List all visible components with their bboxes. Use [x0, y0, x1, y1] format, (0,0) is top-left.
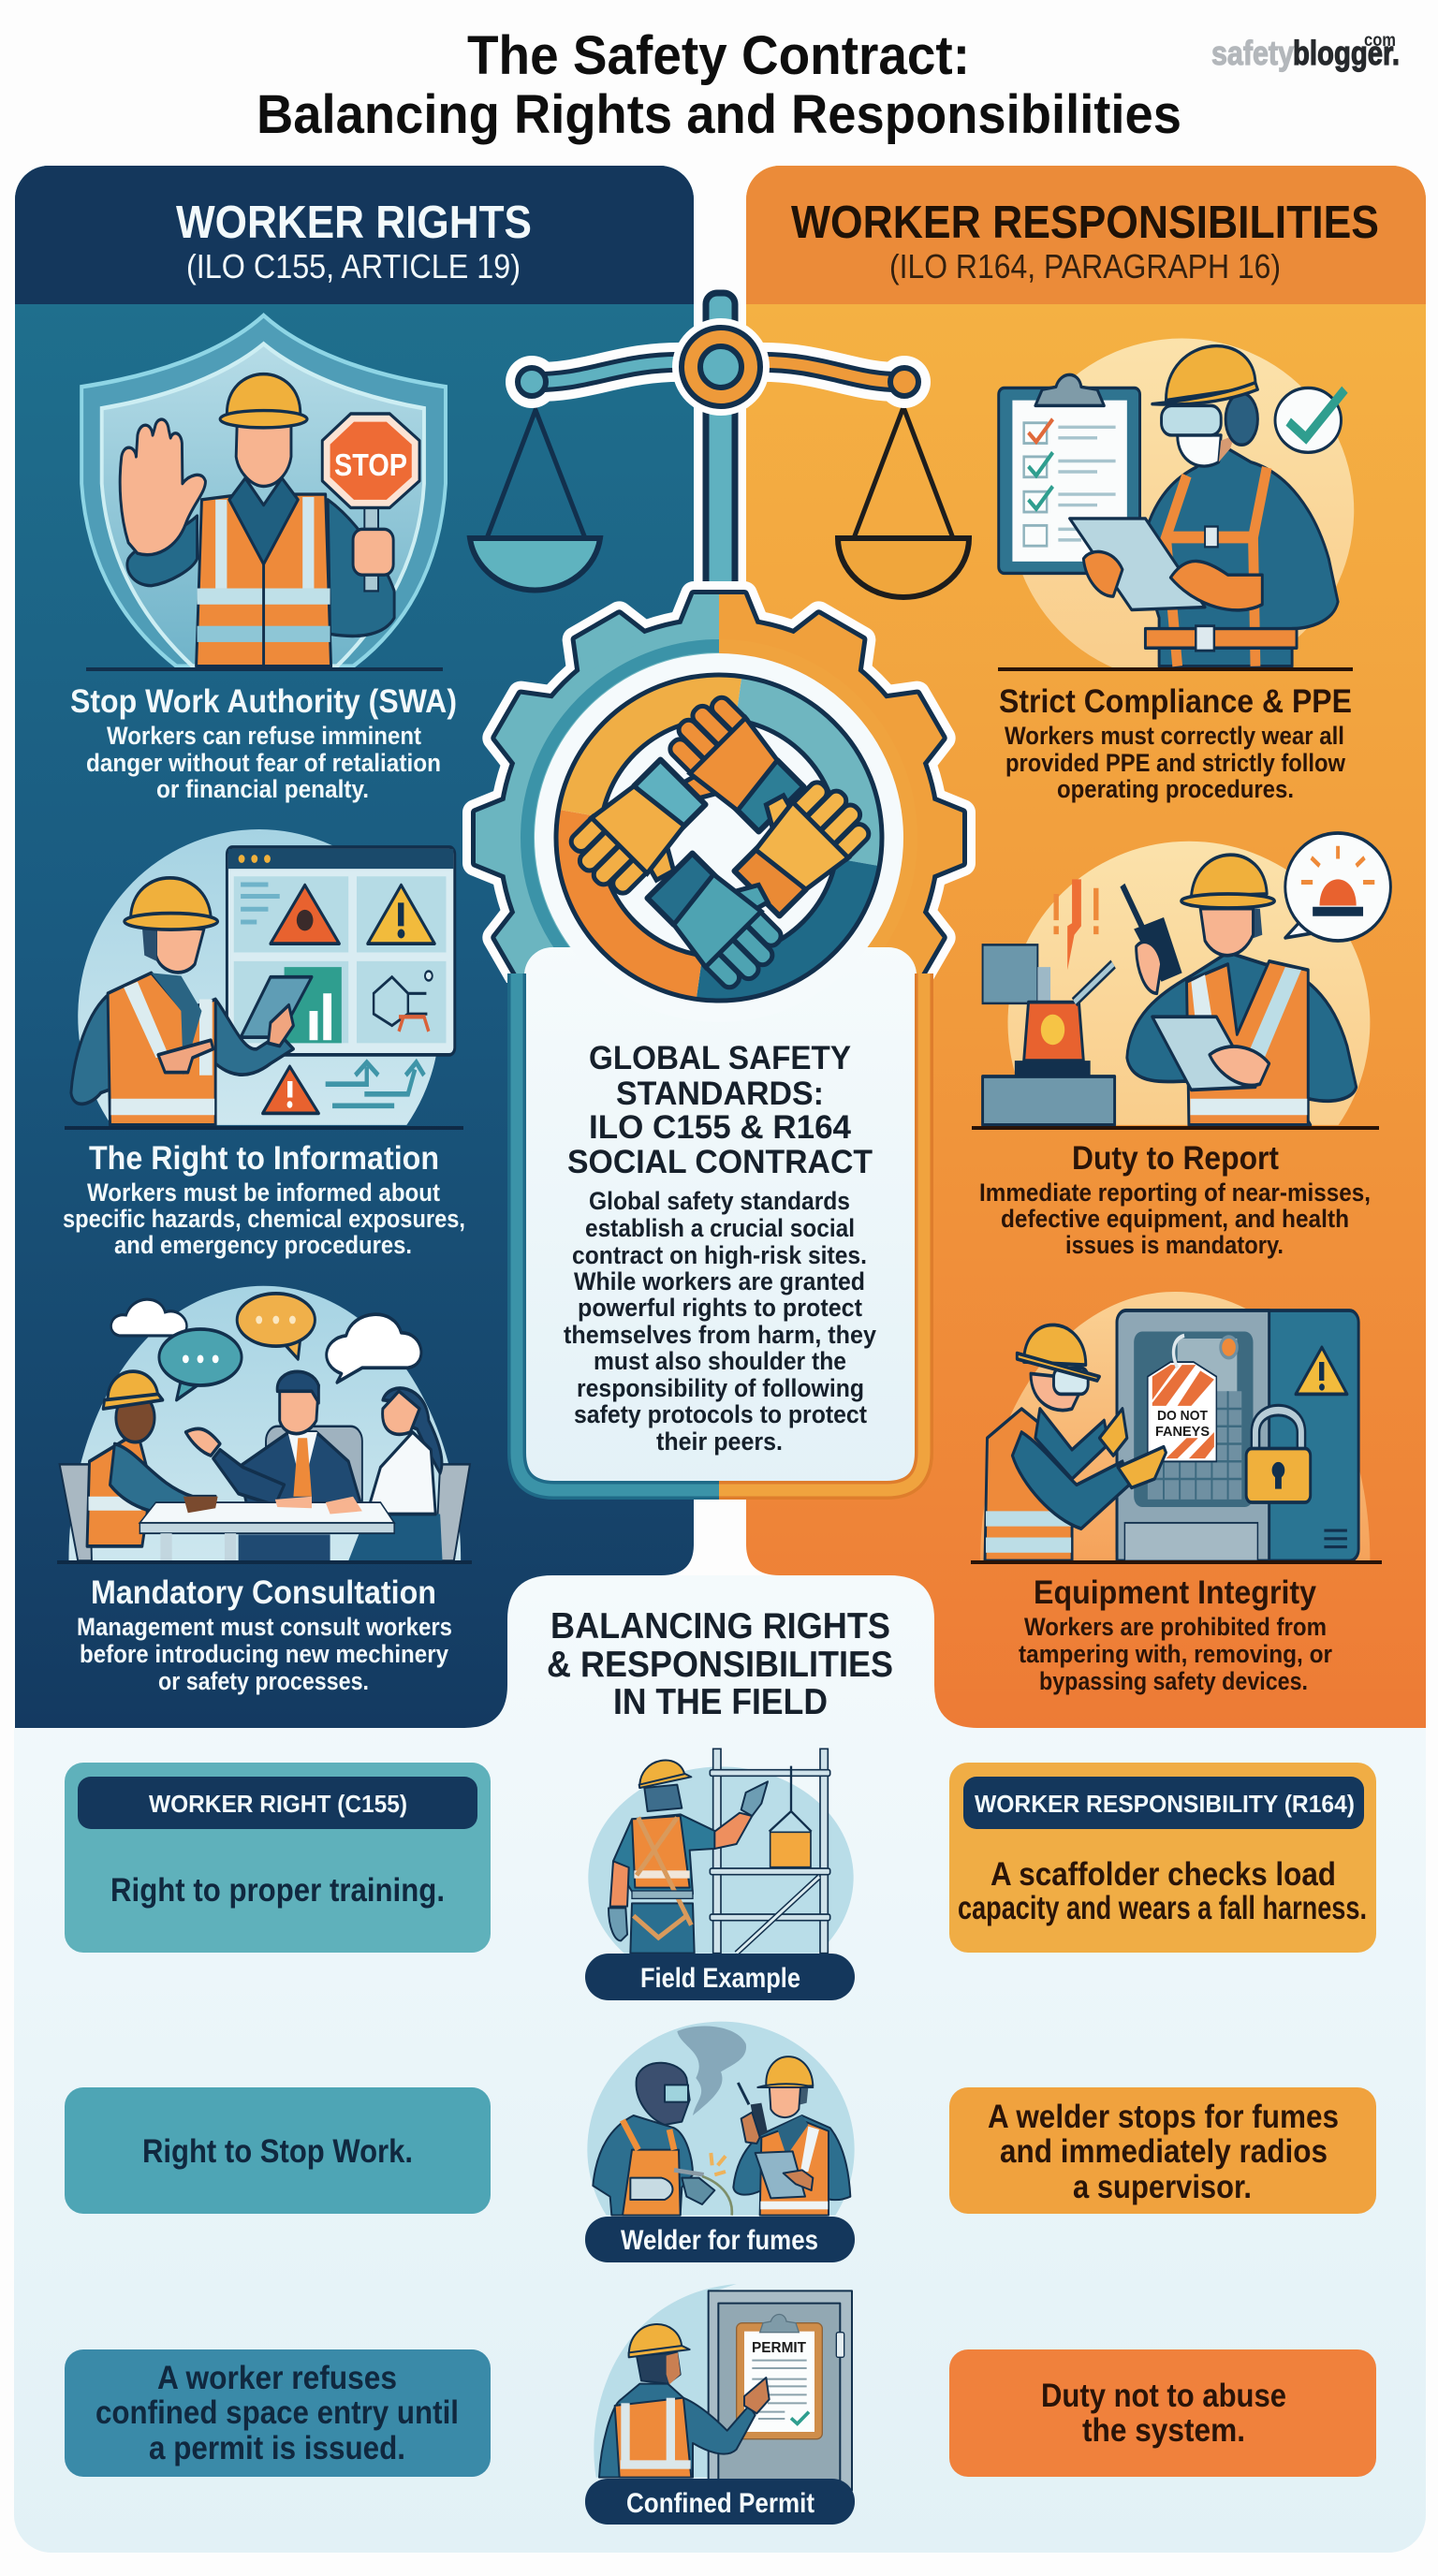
text block: equipment integrity: Equipment Integrity: [1034, 1574, 1316, 1611]
text block: mandatory consultation: [57, 1562, 472, 1695]
logo: safetyblogger.com: [1211, 31, 1400, 72]
text block: global safety standards body: their peers.: [656, 1427, 783, 1456]
logo: safetyblogger.com: blogger.: [1293, 34, 1400, 72]
text block: mandatory consultation: or safety processes.: [158, 1667, 369, 1695]
pill: field example: Field Example: [640, 1963, 800, 1994]
icon: worker reporting defective machine by radio: [983, 833, 1390, 1125]
icon: balance scale: [470, 293, 969, 597]
hand: left: [563, 754, 723, 915]
card: worker right C155: [65, 1763, 491, 1953]
text block: mandatory consultation: Management must consult workers: [77, 1613, 452, 1641]
heading: worker rights: [176, 198, 532, 285]
text block: global safety standards body: Global safety standards: [589, 1187, 850, 1215]
title: [257, 25, 1181, 145]
panel header band: worker rights: [15, 166, 694, 304]
text block: strict compliance and PPE: Strict Compliance & PPE: [999, 683, 1352, 720]
text block: mandatory consultation: before introducing new mechinery: [80, 1640, 448, 1668]
pill: confined permit: [585, 2479, 855, 2525]
pill: worker right: [78, 1777, 477, 1829]
pill: worker right: WORKER RIGHT (C155): [149, 1790, 407, 1818]
card: duty not to abuse the system: [949, 2349, 1376, 2477]
card: right to stop work: Right to Stop Work.: [142, 2133, 413, 2170]
panel: lower field section background: [14, 1575, 1426, 2553]
text block: global safety standards body: [564, 1187, 876, 1456]
hand: bottom: [642, 836, 802, 996]
label: do not tag: DO NOT: [1157, 1408, 1208, 1424]
heading: worker rights: (ILO C155, ARTICLE 19): [186, 247, 521, 285]
left scale pan: [470, 538, 600, 590]
text block: global safety standards body: safety protocols to protect: [574, 1400, 867, 1428]
text block: the right to information: specific hazards, chemical exposures,: [63, 1205, 465, 1233]
panel: worker rights: [15, 166, 694, 1728]
heading: global safety standards: GLOBAL SAFETY: [589, 1040, 851, 1076]
text block: duty to report: defective equipment, and health: [1001, 1205, 1349, 1233]
text block: stop work authority: [70, 669, 457, 803]
pill: worker responsibility: WORKER RESPONSIBILITY (R164): [975, 1790, 1355, 1818]
text block: equipment integrity: [971, 1562, 1382, 1695]
pill: worker responsibility: [963, 1777, 1364, 1829]
text block: strict compliance and PPE: [998, 669, 1353, 803]
text block: global safety standards body: themselves from harm, they: [564, 1321, 876, 1349]
heading: global safety standards: SOCIAL CONTRACT: [567, 1144, 873, 1180]
icon: gear with joined hands: [476, 594, 962, 1490]
text block: global safety standards body: contract on high-risk sites.: [572, 1241, 867, 1269]
text block: the right to information: and emergency procedures.: [114, 1231, 412, 1259]
panel: worker responsibilities: [746, 166, 1426, 1728]
card: welder stops for fumes: a supervisor.: [1073, 2169, 1252, 2205]
icon: consultation meeting: [60, 1286, 470, 1561]
text block: stop work authority: Stop Work Authority (SWA): [70, 683, 457, 720]
logo: safetyblogger.com: com: [1364, 31, 1396, 51]
heading: balancing rights and responsibilities in the field: BALANCING RIGHTS: [550, 1606, 890, 1647]
text block: duty to report: issues is mandatory.: [1065, 1231, 1284, 1259]
pill: field example: [585, 1954, 855, 2000]
hand: top: [649, 689, 809, 849]
heading: worker rights: WORKER RIGHTS: [176, 198, 532, 248]
text block: strict compliance and PPE: provided PPE and strictly follow: [1005, 749, 1346, 777]
card: worker right C155: Right to proper training.: [110, 1872, 445, 1909]
icon: worker with stop sign in shield: [81, 315, 446, 666]
card: right to stop work: [65, 2087, 491, 2214]
text block: the right to information: [63, 1128, 465, 1259]
card: worker responsibility R164: [949, 1763, 1376, 1953]
text block: equipment integrity: bypassing safety devices.: [1039, 1667, 1308, 1695]
panel header band: worker responsibilities: [746, 166, 1426, 304]
text block: global safety standards body: responsibility of following: [577, 1374, 864, 1402]
heading: worker responsibilities: [791, 198, 1379, 285]
text block: stop work authority: Workers can refuse imminent: [107, 722, 421, 750]
text block: global safety standards body: powerful rights to protect: [578, 1294, 862, 1322]
text block: global safety standards body: establish a crucial social: [585, 1214, 855, 1242]
card: worker refuses confined space entry: A worker refuses: [157, 2360, 397, 2396]
text block: the right to information: The Right to Information: [89, 1140, 439, 1177]
text block: global safety standards body: While workers are granted: [574, 1267, 865, 1295]
icon: worker checking confined space permit: [594, 2284, 852, 2491]
card: duty not to abuse the system: Duty not to abuse: [1041, 2378, 1286, 2414]
heading: balancing rights and responsibilities in the field: [547, 1606, 893, 1722]
heading: global safety standards: ILO C155 & R164: [589, 1109, 852, 1146]
card: welder stops for fumes: and immediately radios: [1000, 2133, 1328, 2170]
right scale pan: [838, 538, 969, 597]
text block: mandatory consultation: Mandatory Consultation: [91, 1574, 436, 1611]
card: worker refuses confined space entry: a permit is issued.: [149, 2430, 405, 2466]
logo: safetyblogger.com: safety: [1211, 34, 1294, 72]
label: permit: PERMIT: [752, 2340, 806, 2356]
pill: welder for fumes: [585, 2217, 855, 2262]
text block: duty to report: Duty to Report: [1072, 1140, 1279, 1177]
heading: worker responsibilities: (ILO R164, PARAGRAPH 16): [889, 247, 1281, 285]
title: The Safety Contract:: [467, 25, 970, 86]
label: do not tag: FANEYS: [1155, 1424, 1210, 1440]
text block: equipment integrity: Workers are prohibited from: [1024, 1613, 1327, 1641]
text block: global safety standards body: must also shoulder the: [594, 1347, 846, 1375]
text block: duty to report: Immediate reporting of near-misses,: [979, 1178, 1371, 1207]
icon: worker with locked out equipment and tag: [980, 1292, 1370, 1561]
text block: strict compliance and PPE: operating procedures.: [1057, 775, 1294, 803]
text block: stop work authority: danger without fear of retaliation: [86, 749, 441, 777]
card: worker refuses confined space entry: [65, 2349, 491, 2477]
text block: the right to information: Workers must be informed about: [87, 1178, 440, 1207]
label: do not tag: [1155, 1408, 1210, 1440]
heading: balancing rights and responsibilities in the field: IN THE FIELD: [613, 1682, 828, 1722]
card: welder stops for fumes: [949, 2087, 1376, 2214]
card: worker refuses confined space entry: confined space entry until: [95, 2394, 459, 2431]
heading: global safety standards: STANDARDS:: [616, 1076, 824, 1112]
icon: welder and supervisor with fumes: [587, 2022, 855, 2216]
heading: worker responsibilities: WORKER RESPONSIBILITIES: [791, 198, 1379, 248]
card: worker responsibility R164: A scaffolder checks load: [990, 1856, 1336, 1893]
card: welder stops for fumes: A welder stops for fumes: [988, 2099, 1339, 2135]
icon: scaffolder checking load: [588, 1749, 854, 1954]
text block: equipment integrity: tampering with, removing, or: [1019, 1640, 1332, 1668]
text block: strict compliance and PPE: Workers must correctly wear all: [1005, 722, 1344, 750]
pill: welder for fumes: Welder for fumes: [621, 2225, 818, 2256]
heading: balancing rights and responsibilities in the field: & RESPONSIBILITIES: [547, 1645, 893, 1685]
text block: duty to report: [972, 1128, 1379, 1259]
label: stop sign: STOP: [334, 447, 407, 482]
panel: global safety standards card: [517, 947, 924, 1490]
heading: global safety standards: [567, 1040, 873, 1180]
icon: worker in PPE with checklist: [999, 339, 1354, 669]
text block: stop work authority: or financial penalty.: [156, 775, 369, 803]
icon: worker with hazard information screen: [71, 829, 455, 1125]
hand: right: [717, 761, 877, 921]
card: duty not to abuse the system: the system.: [1082, 2412, 1245, 2449]
pill: confined permit: Confined Permit: [626, 2488, 814, 2519]
title: Balancing Rights and Responsibilities: [257, 84, 1181, 145]
